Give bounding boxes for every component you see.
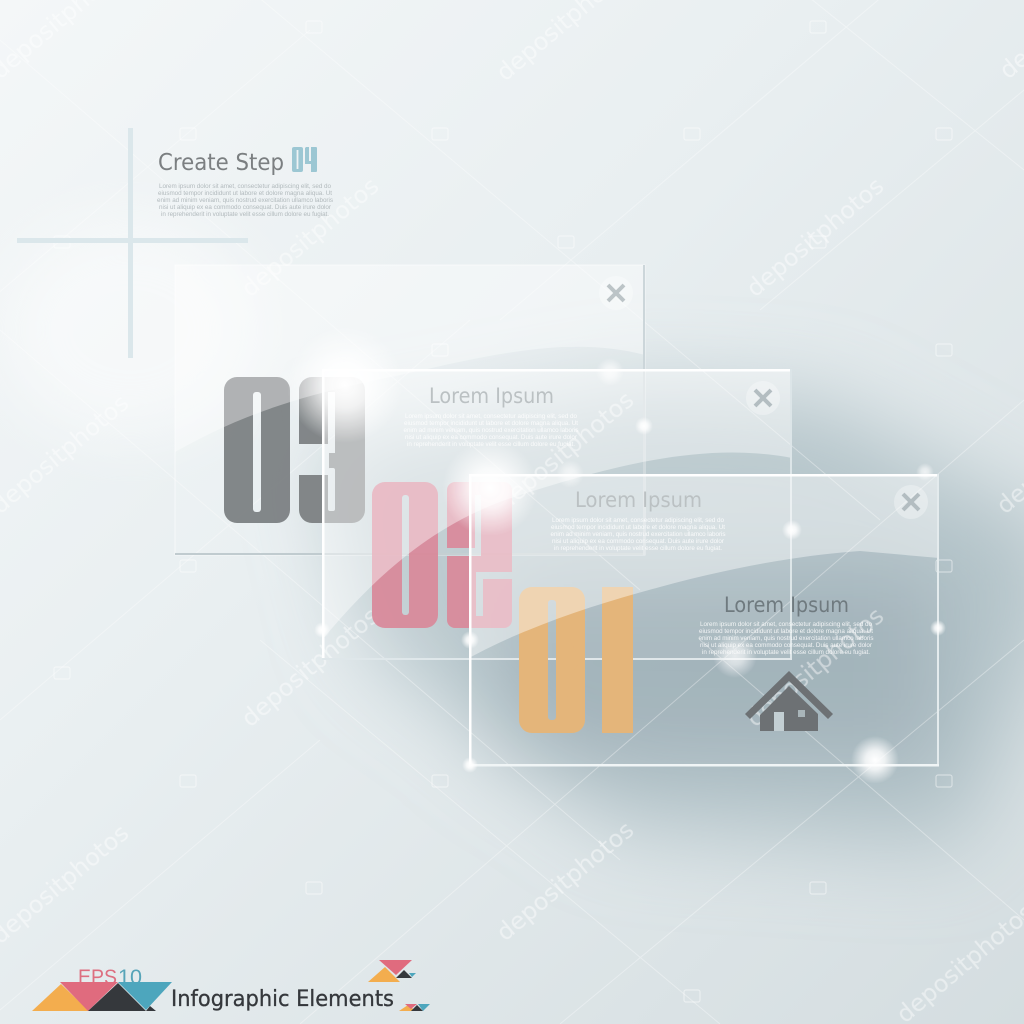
- heading: step 02: Lorem Ipsum: [429, 384, 554, 408]
- text block: step 01 lower: enim ad minim veniam, quis nostrud exercitation ullamco laboris: [698, 635, 874, 642]
- number 01: 0: [515, 550, 589, 768]
- number 02: 0: [368, 445, 442, 663]
- text block: step 01 upper: [550, 517, 726, 552]
- text block: step 04: eiusmod tempor incididunt ut labore et dolore magna aliqua. Ut: [158, 190, 332, 197]
- footer title: Infographic Elements: [171, 987, 394, 1012]
- crosshair lines: [17, 128, 248, 358]
- watermark text: depositphotos: [236, 602, 384, 733]
- watermark text: depositphotos: [491, 816, 639, 947]
- icon: house: [745, 671, 833, 731]
- panel: step 01: [469, 474, 939, 768]
- watermark text: depositphotos: [236, 172, 384, 303]
- heading: Create Step 04: 4: [305, 142, 317, 175]
- number 03: 3: [295, 340, 369, 558]
- text block: step 04: Lorem ipsum dolor sit amet, consectetur adipiscing elit, sed do: [159, 183, 331, 190]
- close button: [599, 276, 633, 310]
- text block: step 02: Lorem ipsum dolor sit amet, consectetur adipiscing elit, sed do: [405, 413, 577, 420]
- text block: step 01 upper: eiusmod tempor incididunt ut labore et dolore magna aliqua. Ut: [551, 524, 725, 531]
- panel: step 03: [175, 265, 645, 558]
- watermark text: depositphotos: [741, 172, 889, 303]
- footer triangles bottom: [399, 1004, 430, 1011]
- number 01: 1: [579, 550, 653, 768]
- footer logo: EPS10 and triangles: EPS: [78, 966, 117, 989]
- light glows: [287, 327, 946, 784]
- number 02: [372, 482, 512, 628]
- footer triangles top: [368, 960, 416, 982]
- text block: step 01 lower: nisi ut aliquip ex ea commodo consequat. Duis aute irure dolor: [700, 642, 872, 649]
- text block: step 04: in reprehenderit in voluptate velit esse cillum dolore eu fugiat.: [161, 211, 329, 218]
- heading: step 01: Lorem Ipsum: [575, 488, 702, 512]
- soft shadow behind panels: [320, 390, 1024, 850]
- text block: step 02: nisi ut aliquip ex ea commodo consequat. Duis aute irure dolor: [405, 434, 577, 441]
- watermark text: depositphotos: [741, 602, 889, 733]
- text block: step 02: enim ad minim veniam, quis nostrud exercitation ullamco laboris: [404, 427, 578, 434]
- number 01: [519, 587, 633, 733]
- text block: step 01 upper: enim ad minim veniam, quis nostrud exercitation ullamco laboris: [550, 531, 726, 538]
- close button: [746, 381, 780, 415]
- text block: step 01 lower: in reprehenderit in voluptate velit esse cillum dolore eu fugiat.: [702, 649, 870, 656]
- footer logo: EPS10 and triangles: [32, 966, 172, 1011]
- text block: step 02: eiusmod tempor incididunt ut labore et dolore magna aliqua. Ut: [404, 420, 578, 427]
- bright glare upper left: [0, 220, 260, 440]
- text block: step 01 upper: Lorem ipsum dolor sit amet, consectetur adipiscing elit, sed do: [552, 517, 724, 524]
- text block: step 04: [157, 183, 333, 218]
- text block: step 01 lower: [698, 621, 874, 656]
- number 02: 2: [443, 445, 517, 663]
- text block: step 04: nisi ut aliquip ex ea commodo consequat. Duis aute irure dolor: [159, 204, 331, 211]
- footer logo: EPS10 and triangles: 10: [118, 966, 142, 989]
- panel: step 02: [322, 369, 792, 663]
- text block: step 01 lower: Lorem ipsum dolor sit amet, consectetur adipiscing elit, sed do: [700, 621, 872, 628]
- text block: step 01 upper: nisi ut aliquip ex ea commodo consequat. Duis aute irure dolor: [552, 538, 724, 545]
- text block: step 04: enim ad minim veniam, quis nostrud exercitation ullamco laboris: [157, 197, 333, 204]
- text block: step 02: in reprehenderit in voluptate velit esse cillum dolore eu fugiat.: [407, 441, 575, 448]
- close button: [894, 485, 928, 519]
- heading: Create Step 04: 0: [291, 142, 304, 175]
- number 03: 0: [220, 340, 294, 558]
- number 03: [224, 377, 365, 523]
- text block: step 01 lower: eiusmod tempor incididunt ut labore et dolore magna aliqua. Ut: [699, 628, 873, 635]
- text block: step 01 upper: in reprehenderit in voluptate velit esse cillum dolore eu fugiat.: [554, 545, 722, 552]
- heading: Create Step 04: Create Step: [158, 150, 284, 176]
- watermark text: depositphotos: [491, 386, 639, 517]
- heading: step 01 lower: Lorem Ipsum: [724, 593, 849, 617]
- text block: step 02: [404, 413, 578, 448]
